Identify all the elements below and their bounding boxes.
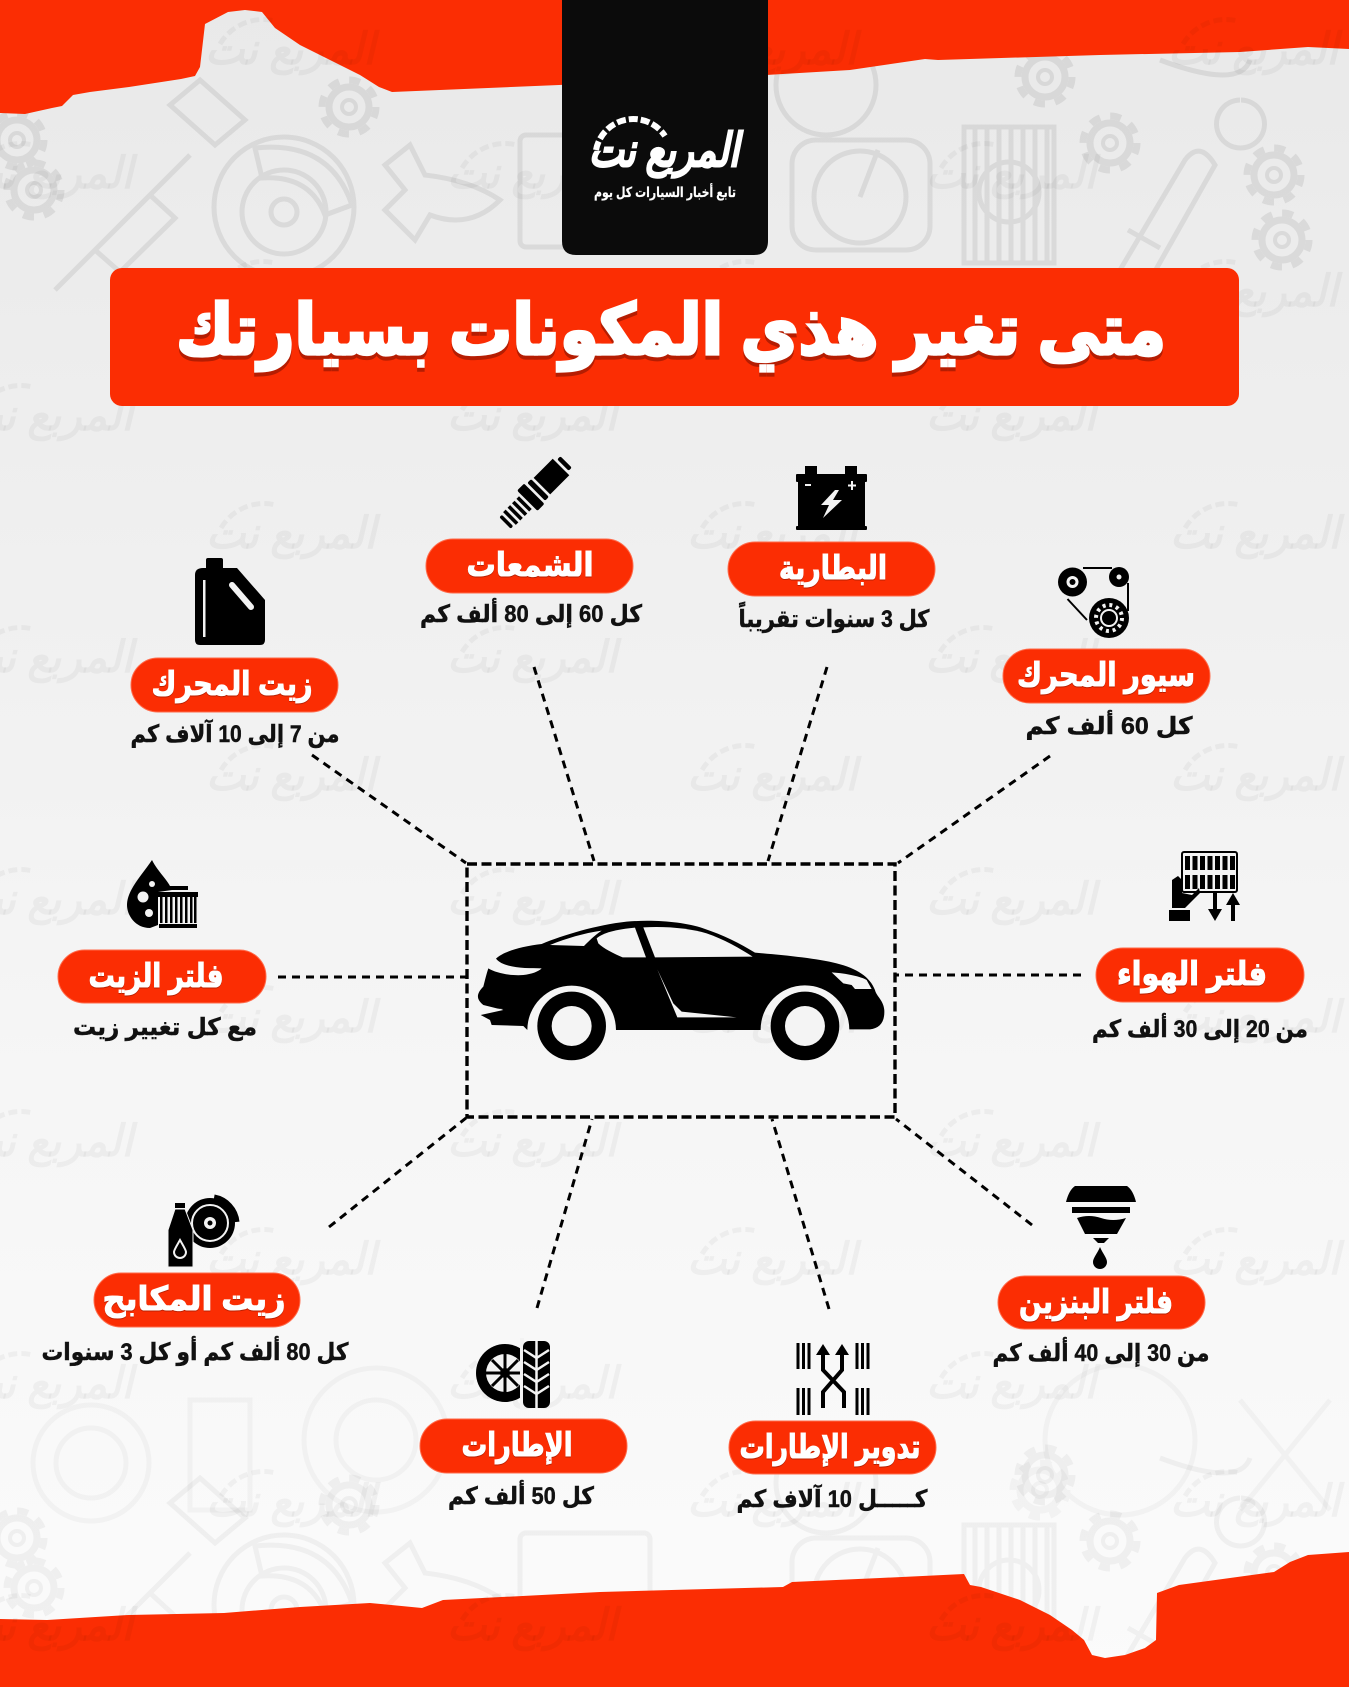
pill: tires (420, 1419, 627, 1473)
watermarks: المربع نت (926, 149, 1101, 200)
item: air filter (1092, 852, 1308, 1043)
watermarks: المربع نت (1168, 267, 1343, 318)
watermarks: المربع نت (447, 1601, 622, 1652)
logo panel (562, 0, 768, 255)
icon: car (478, 921, 884, 1060)
label: engine belts: سيور المحرك (1017, 656, 1195, 695)
background pattern: top car parts (0, 35, 1309, 290)
watermarks: المربع نت (925, 633, 1100, 684)
watermarks: المربع نت (206, 751, 381, 802)
label: engine oil: زيت المحرك (152, 665, 312, 704)
watermarks: المربع نت (447, 149, 622, 200)
label: fuel filter: فلتر البنزين (1019, 1283, 1173, 1322)
label: tire rotation: تدوير الإطارات (740, 1428, 920, 1467)
background pattern: lower wheels and tools (33, 1365, 1330, 1521)
item: fuel filter (992, 1186, 1210, 1367)
pill: tire rotation (729, 1421, 936, 1474)
interval: tire rotation: كـــــل 10 آلاف كم (736, 1484, 928, 1513)
watermarks: المربع نت (926, 1601, 1101, 1652)
watermarks: المربع نت (687, 1477, 862, 1528)
item: tire rotation (729, 1343, 936, 1513)
watermarks: المربع نت (447, 391, 622, 442)
watermarks: المربع نت (687, 993, 862, 1044)
label: battery: البطارية (779, 549, 887, 587)
pill: fuel filter (998, 1276, 1205, 1329)
interval: engine belts: كل 60 ألف كم (1026, 710, 1193, 740)
watermarks: المربع نت (205, 267, 380, 318)
background pattern: bottom car parts (0, 1433, 1309, 1687)
pill: air filter (1096, 948, 1304, 1002)
pill: oil filter (58, 950, 266, 1003)
item: oil filter (58, 860, 266, 1041)
watermarks: المربع نت (687, 751, 862, 802)
interval: spark plugs: كل 60 إلى 80 ألف كم (420, 598, 642, 628)
item: brake oil (42, 1198, 349, 1366)
item: tires (420, 1338, 627, 1510)
item: engine oil (131, 558, 340, 748)
icon: brake fluid and disc (168, 1198, 236, 1267)
watermarks: المربع نت (926, 1359, 1101, 1410)
watermarks: المربع نت (447, 875, 622, 926)
watermarks: المربع نت (1170, 993, 1345, 1044)
watermarks: المربع نت (206, 1235, 381, 1286)
icon: oil drop and filter (127, 860, 198, 928)
watermarks: المربع نت (1168, 25, 1343, 76)
interval: engine oil: من 7 إلى 10 آلاف كم (131, 719, 340, 748)
watermarks: المربع نت (447, 633, 622, 684)
item: spark plugs (420, 452, 642, 628)
watermarks: المربع نت (687, 509, 862, 560)
logo tagline: تابع أخبار السيارات كل يوم (594, 183, 736, 201)
interval: brake oil: كل 80 ألف كم أو كل 3 سنوات (42, 1336, 349, 1366)
icon: fuel filter (1066, 1186, 1136, 1269)
interval: battery: كل 3 سنوات تقريباً (738, 602, 930, 633)
icon: tire and tread (476, 1338, 550, 1410)
watermarks: المربع نت (926, 391, 1101, 442)
watermarks: المربع نت (447, 1117, 622, 1168)
label: brake oil: زيت المكابح (102, 1280, 286, 1319)
pill: spark plugs (426, 539, 633, 593)
watermarks: المربع نت (926, 1117, 1101, 1168)
logo wordmark: المربع نت (589, 124, 744, 178)
watermarks: المربع نت (687, 1235, 862, 1286)
car frame (467, 864, 895, 1117)
label: tires: الإطارات (462, 1426, 572, 1464)
pill: brake oil (94, 1273, 300, 1327)
watermarks: المربع نت (206, 993, 381, 1044)
label: spark plugs: الشمعات (466, 546, 594, 583)
pill: engine belts (1003, 649, 1210, 703)
watermarks: المربع نت (206, 509, 381, 560)
pill: engine oil (131, 658, 338, 712)
interval: tires: كل 50 ألف كم (448, 1480, 594, 1510)
watermarks: المربع نت (687, 25, 862, 76)
interval: air filter: من 20 إلى 30 ألف كم (1092, 1013, 1308, 1043)
watermarks: المربع نت (1170, 751, 1345, 802)
title: متى تغير هذي المكونات بسيارتك (176, 291, 1166, 371)
watermarks: المربع نت (1170, 509, 1345, 560)
icon: battery (796, 466, 867, 530)
item: battery (728, 466, 935, 633)
watermarks: المربع نت (447, 1359, 622, 1410)
watermarks: المربع نت (205, 25, 380, 76)
label: oil filter: فلتر الزيت (88, 957, 224, 996)
torn red band: bottom (0, 1552, 1349, 1687)
item: engine belts (1003, 567, 1210, 740)
watermarks: المربع نت (1170, 1235, 1345, 1286)
interval: oil filter: مع كل تغيير زيت (73, 1014, 257, 1041)
connector lines (278, 667, 1081, 1309)
icon: tire rotation arrows (798, 1343, 868, 1415)
icon: belt and pulleys (1058, 567, 1129, 638)
label: air filter: فلتر الهواء (1117, 955, 1267, 994)
torn red band: top (0, 0, 1349, 114)
pill: battery (728, 542, 935, 596)
title banner (110, 268, 1239, 406)
watermarks: المربع نت (926, 875, 1101, 926)
interval: fuel filter: من 30 إلى 40 ألف كم (992, 1337, 1210, 1367)
logo gauge mark (596, 119, 665, 150)
watermarks: المربع نت (687, 267, 862, 318)
icon: oil jug (195, 558, 265, 645)
icon: spark plug (495, 452, 576, 533)
watermarks: المربع نت (1170, 1477, 1345, 1528)
icon: air filter and hand (1169, 852, 1240, 921)
watermarks: المربع نت (206, 1477, 381, 1528)
